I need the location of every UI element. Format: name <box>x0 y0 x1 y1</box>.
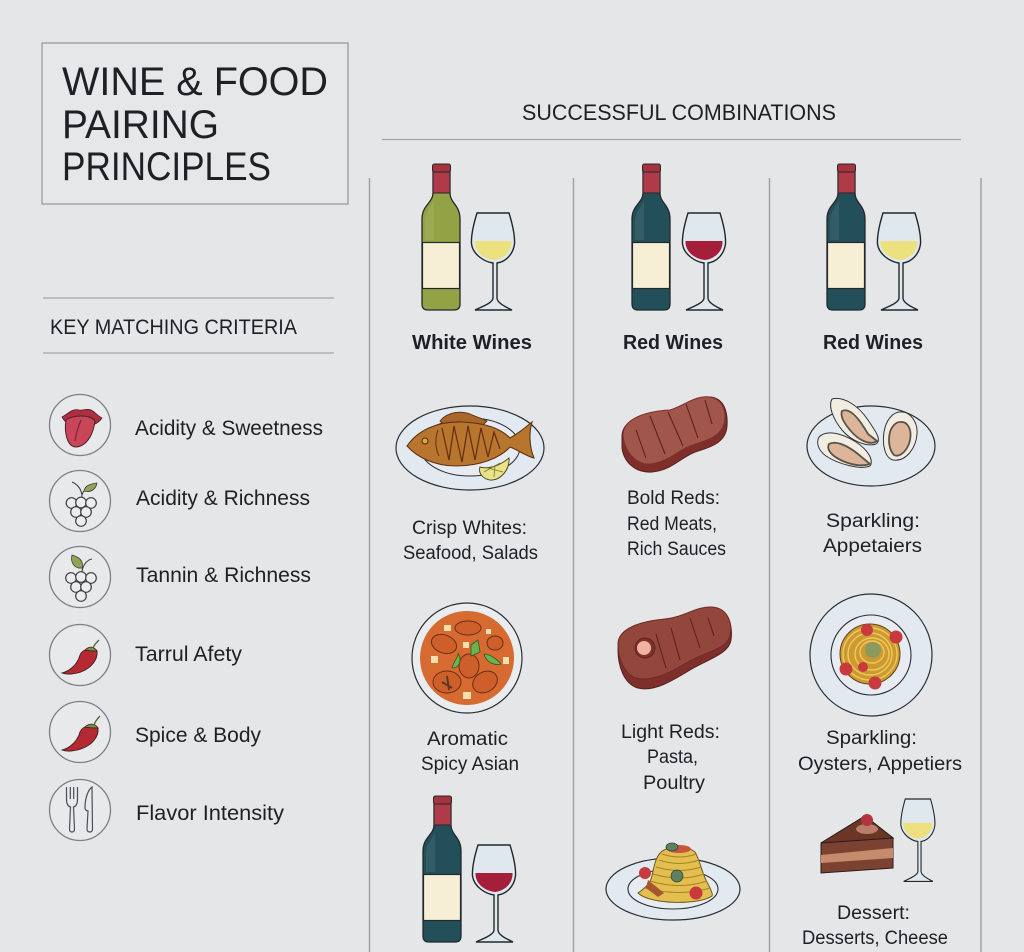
food: oysters on plate <box>807 398 935 486</box>
label: light reds: Pasta, <box>647 747 698 768</box>
criterion: acidity and richness: Acidity & Richness <box>136 487 310 510</box>
title <box>42 43 348 204</box>
icon: chili pepper <box>50 702 110 762</box>
icon: white wine bottle <box>422 164 460 310</box>
food: grilled steak <box>622 397 727 472</box>
label: sparkling oysters appetiers: Oysters, Appetiers <box>798 754 962 775</box>
criterion: tarrul afety: Tarrul Afety <box>135 643 243 666</box>
icon: chili pepper <box>50 624 110 686</box>
column: red wines with white glass <box>823 164 923 354</box>
icon: red wine glass <box>682 213 726 310</box>
food: curry bowl <box>412 603 522 713</box>
label: sparkling oysters appetiers <box>798 728 962 775</box>
label: bold reds: Rich Sauces <box>627 539 726 560</box>
criterion: spice and body: Spice & Body <box>135 724 261 747</box>
criterion: tarrul afety <box>50 624 243 686</box>
icon: tongue <box>50 394 110 456</box>
criterion: acidity and richness <box>50 470 310 532</box>
label: bold reds: Bold Reds: <box>627 488 720 509</box>
food: chocolate cake slice <box>821 814 893 873</box>
food: pasta in round plate <box>810 594 932 716</box>
icon: grapes with left leaf <box>50 546 110 608</box>
label: bold reds <box>627 488 726 560</box>
icon: red wine bottle <box>827 164 865 310</box>
food: steak with bone <box>618 607 731 689</box>
food: pasta stack on plate <box>606 843 740 920</box>
criterion: flavor intensity <box>50 780 285 840</box>
label: light reds <box>621 722 720 794</box>
title: PRINCIPLES <box>62 145 271 189</box>
icon: white wine glass <box>877 213 921 310</box>
food: fish on plate <box>396 406 544 490</box>
title: PAIRING <box>62 103 219 147</box>
icon: red wine bottle <box>423 796 461 942</box>
column: red wines <box>623 164 726 354</box>
label: crisp whites: Crisp Whites: <box>412 518 527 539</box>
heading: successful combinations: SUCCESSFUL COMBINATIONS <box>522 100 836 125</box>
label: crisp whites: Seafood, Salads <box>403 543 538 564</box>
heading: key matching criteria: KEY MATCHING CRITERIA <box>50 316 297 339</box>
label: dessert: Dessert: <box>837 903 910 924</box>
label: sparkling appetaiers: Appetaiers <box>823 536 922 557</box>
label: light reds: Poultry <box>643 773 706 794</box>
label: bold reds: Red Meats, <box>627 514 717 535</box>
icon: red wine glass <box>472 845 516 942</box>
column: white wines <box>412 164 532 354</box>
column heading: Red Wines <box>823 332 923 354</box>
label: crisp whites <box>403 518 538 564</box>
title: WINE & FOOD <box>62 60 328 104</box>
criterion: flavor intensity: Flavor Intensity <box>136 802 285 825</box>
icon: red wine bottle <box>632 164 670 310</box>
icon: dessert wine glass <box>901 799 935 881</box>
icon: white wine glass <box>471 213 515 310</box>
criterion: acidity and sweetness: Acidity & Sweetness <box>135 417 323 440</box>
icon: grapes with right leaf <box>50 470 110 532</box>
wine pair: red bottle and glass <box>423 796 516 942</box>
criterion: tannin and richness: Tannin & Richness <box>136 564 311 587</box>
criterion: spice and body <box>50 702 261 762</box>
label: sparkling appetaiers <box>823 511 922 557</box>
label: light reds: Light Reds: <box>621 722 720 743</box>
criterion: acidity and sweetness <box>50 394 323 456</box>
column heading: White Wines <box>412 332 532 354</box>
label: aromatic spicy asian: Spicy Asian <box>421 754 519 775</box>
label: dessert <box>802 903 948 949</box>
label: sparkling oysters appetiers: Sparkling: <box>826 728 917 749</box>
label: sparkling appetaiers: Sparkling: <box>826 511 920 532</box>
criterion: tannin and richness <box>50 546 311 608</box>
icon: fork and knife <box>50 780 110 840</box>
column heading: Red Wines <box>623 332 723 354</box>
label: dessert: Desserts, Cheese <box>802 928 948 949</box>
label: aromatic spicy asian <box>421 729 519 775</box>
label: aromatic spicy asian: Aromatic <box>427 729 508 750</box>
